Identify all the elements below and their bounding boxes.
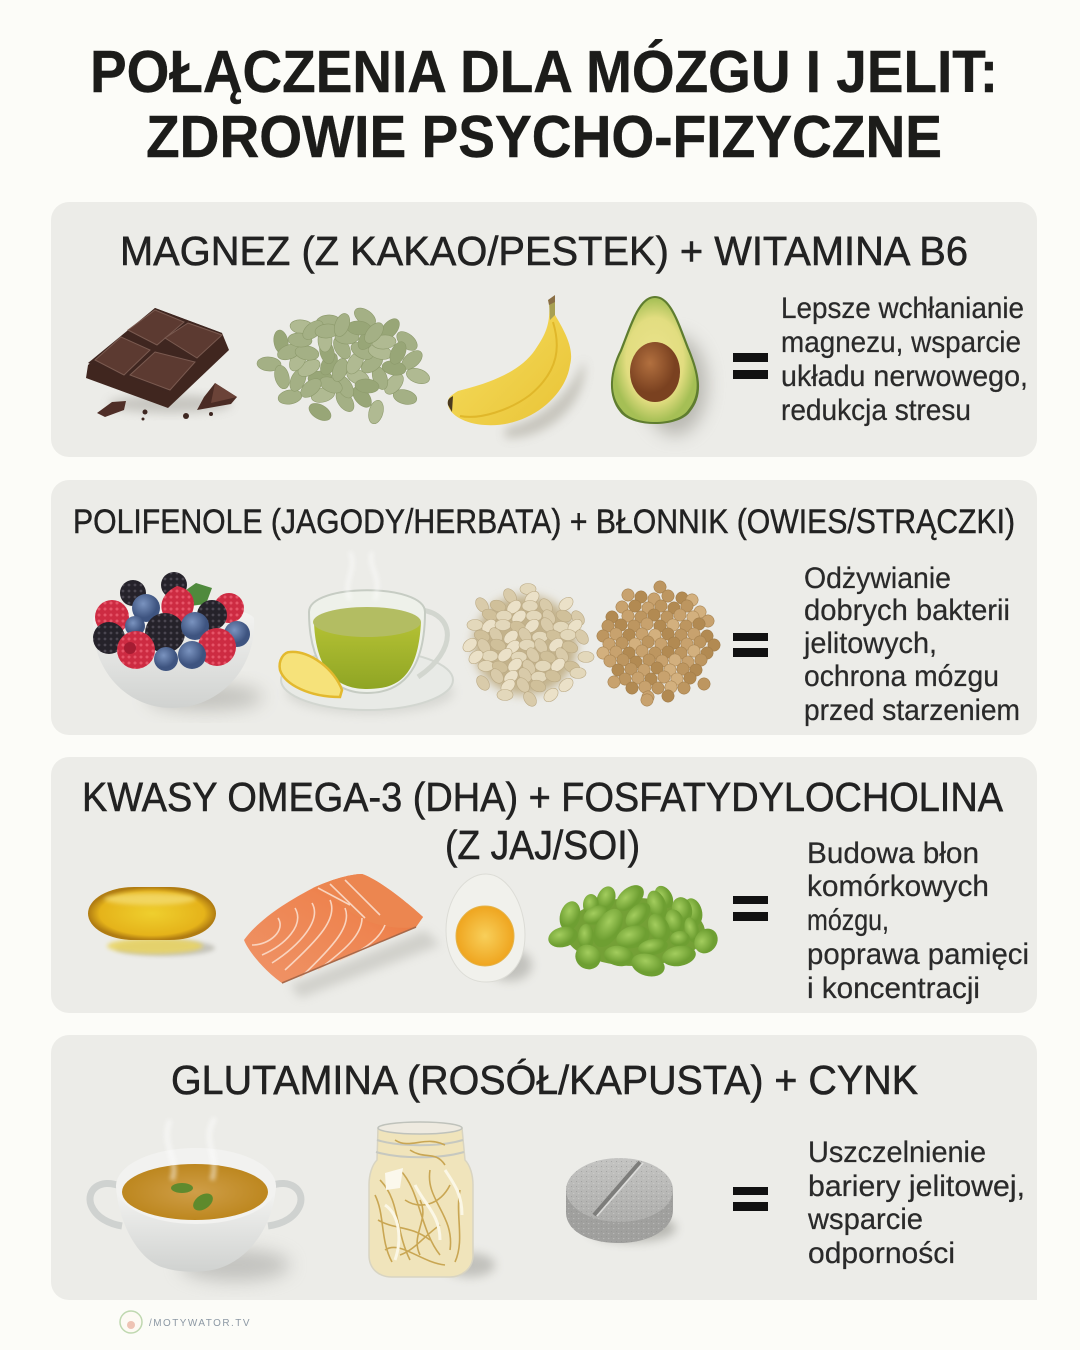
- icon: equals: [733, 1187, 768, 1211]
- text: effect omega-3: mózgu,: [807, 904, 889, 937]
- text: effect omega-3: i koncentracji: [807, 972, 980, 1005]
- text: effect omega-3: Budowa błon: [807, 837, 979, 870]
- title: ZDROWIE PSYCHO-FIZYCZNE: [146, 104, 942, 170]
- text: effect glutamina: Uszczelnienie: [808, 1136, 986, 1169]
- icon: zinc tablet: [566, 1158, 676, 1243]
- icon: pumpkin seeds: [257, 304, 432, 425]
- text: effect glutamina: [807, 1136, 1025, 1270]
- text: effect glutamina: odporności: [808, 1237, 955, 1270]
- icon: equals: [733, 353, 768, 379]
- icon: boiled egg: [446, 874, 532, 982]
- text: effect omega-3: poprawa pamięci: [807, 938, 1029, 971]
- text: effect magnez: redukcja stresu: [781, 394, 971, 427]
- watermark logo: [120, 1311, 251, 1333]
- icon: legumes: [597, 581, 720, 706]
- text: effect polifenole: Odżywianie: [804, 562, 951, 595]
- icon: avocado: [611, 296, 707, 435]
- heading: omega-3: KWASY OMEGA-3 (DHA) + FOSFATYDYLOCHOLINA: [82, 774, 1004, 820]
- text: effect polifenole: [803, 562, 1020, 727]
- icon: equals: [733, 633, 768, 657]
- title: [90, 39, 998, 170]
- text: effect omega-3: [807, 837, 1029, 1005]
- panel: omega-3 + fosfatydylocholina: [51, 757, 1037, 1013]
- text: effect glutamina: wsparcie: [807, 1203, 923, 1236]
- text: effect polifenole: jelitowych,: [803, 627, 937, 660]
- title: POŁĄCZENIA DLA MÓZGU I JELIT:: [90, 39, 998, 105]
- icon: omega-3 capsule: [88, 887, 216, 956]
- panel: glutamina + cynk: [51, 1035, 1037, 1300]
- icon: green tea with lemon: [280, 552, 454, 714]
- panel: polifenole + błonnik: [51, 480, 1037, 735]
- text: effect magnez: [781, 292, 1028, 427]
- icon: sauerkraut jar: [369, 1122, 495, 1277]
- text: effect magnez: magnezu, wsparcie: [781, 326, 1021, 359]
- text: effect omega-3: komórkowych: [807, 870, 989, 903]
- text: effect magnez: układu nerwowego,: [781, 360, 1028, 393]
- panel: magnez + witamina B6: [51, 202, 1037, 457]
- heading: magnez: MAGNEZ (Z KAKAO/PESTEK) + WITAMINA B6: [120, 228, 968, 274]
- heading: omega-3: [82, 774, 1004, 868]
- icon: equals: [733, 896, 768, 921]
- icon: bowl of berries: [93, 572, 263, 710]
- watermark logo: /MOTYWATOR.TV: [149, 1318, 251, 1329]
- text: effect polifenole: ochrona mózgu: [804, 660, 999, 693]
- heading: omega-3: (Z JAJ/SOI): [445, 822, 640, 868]
- icon: oats: [460, 584, 594, 709]
- icon: banana: [448, 295, 585, 438]
- heading: glutamina: GLUTAMINA (ROSÓŁ/KAPUSTA) + CYNK: [171, 1057, 918, 1103]
- icon: edamame: [546, 880, 722, 980]
- icon: salmon fillet: [244, 874, 440, 998]
- text: effect polifenole: przed starzeniem: [804, 694, 1020, 727]
- text: effect magnez: Lepsze wchłanianie: [781, 292, 1024, 325]
- text: effect glutamina: bariery jelitowej,: [808, 1170, 1025, 1203]
- icon: soup bowl: [90, 1118, 301, 1281]
- icon: chocolate: [86, 308, 237, 420]
- text: effect polifenole: dobrych bakterii: [804, 594, 1010, 627]
